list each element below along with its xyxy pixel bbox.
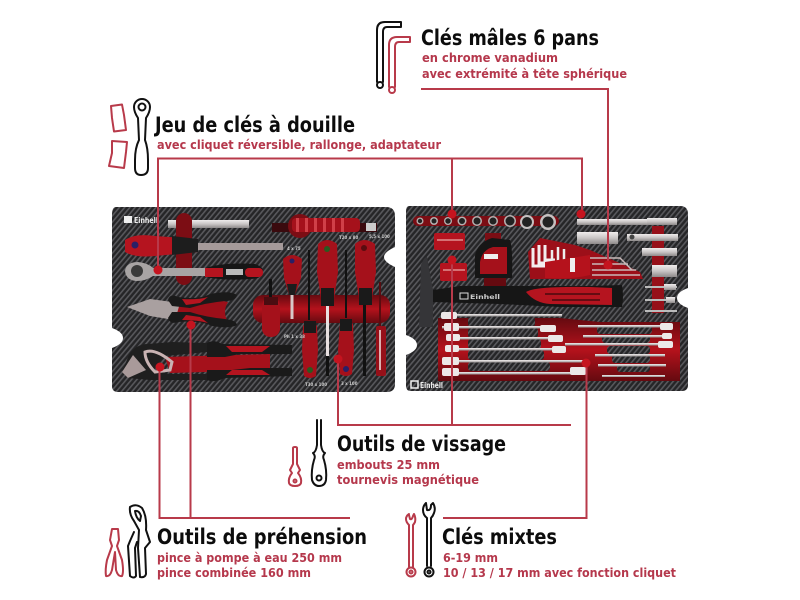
heading: Clés mâles 6 pans: avec extrémité à tête sphérique — [422, 66, 627, 81]
combination wrenches — [441, 312, 673, 377]
tape measure — [475, 233, 512, 286]
heading: Outils de préhension — [157, 525, 367, 580]
heading: Clés mixtes — [442, 525, 676, 580]
small size labels left tray: 4 x 75 — [287, 246, 301, 251]
small size labels left tray: 5,5 x 100 — [369, 234, 390, 239]
heading: Outils de préhension: Outils de préhension — [157, 525, 367, 550]
logo: Einhell right: Einhell — [420, 381, 443, 390]
heading: Outils de vissage: embouts 25 mm — [337, 457, 440, 472]
icon: hex keys — [377, 22, 410, 93]
foam tray right — [406, 206, 688, 391]
tool: lower screwdriver left — [302, 321, 329, 378]
heading: Outils de préhension: pince combinée 160 mm — [157, 565, 311, 580]
heading: Jeu de clés à douille — [153, 113, 442, 152]
socket accessories — [577, 218, 678, 313]
small size labels left tray — [284, 234, 390, 387]
allen key set — [528, 238, 643, 279]
foam islands under wrenches — [468, 317, 652, 372]
bit holders — [434, 233, 467, 281]
icon: wrenches — [406, 503, 435, 576]
tool: ratchet — [125, 262, 263, 281]
tool: screwdriver shafts — [308, 250, 381, 327]
small size labels left tray: Ph 1 x 38 — [284, 334, 305, 339]
sockets row — [413, 214, 559, 230]
heading: Jeu de clés à douille: avec cliquet réversible, rallonge, adaptateur — [157, 137, 442, 152]
heading: Clés mixtes: 10 / 13 / 17 mm avec fonction cliquet — [443, 565, 676, 580]
red vertical cutout — [176, 213, 192, 285]
icon: pliers — [106, 505, 150, 578]
heading: Outils de vissage: tournevis magnétique — [337, 472, 479, 487]
hammer — [419, 257, 623, 327]
tool: screwdriver horizontal — [125, 235, 283, 256]
tool: tall screwdriver green — [317, 240, 338, 356]
heading: Outils de vissage — [337, 432, 506, 487]
heading: Clés mâles 6 pans: Clés mâles 6 pans — [421, 26, 599, 51]
heading: Jeu de clés à douille: Jeu de clés à douille — [153, 113, 355, 138]
heading: Clés mixtes: 6-19 mm — [443, 550, 498, 565]
tool: voltage tester — [376, 326, 386, 376]
panel: left tool tray — [112, 207, 395, 392]
hammer: Einhell — [470, 294, 500, 301]
tool: stubby screwdriver — [262, 279, 280, 337]
icon: screwdrivers — [289, 420, 326, 486]
callout dots — [154, 210, 612, 372]
logo: Einhell right — [411, 381, 443, 390]
panel: right tool tray — [406, 206, 688, 391]
silver bar — [168, 220, 249, 228]
callout lines — [158, 89, 608, 518]
heading: Clés mixtes: Clés mixtes — [442, 525, 557, 550]
tool: small screwdriver — [283, 255, 302, 319]
tool: combination pliers — [127, 292, 237, 327]
logo: Einhell left — [124, 216, 158, 225]
heading: Outils de vissage: Outils de vissage — [337, 432, 506, 457]
heading: Clés mâles 6 pans: en chrome vanadium — [422, 50, 558, 65]
tool: socket extension rack — [272, 214, 377, 238]
icon: ratchet and sockets — [109, 99, 150, 175]
tool: tall screwdriver dark — [355, 240, 376, 376]
red cutout band — [253, 295, 390, 323]
logo: Einhell left: Einhell — [134, 216, 158, 225]
small size labels left tray: 3 x 100 — [341, 381, 358, 386]
tool: water pump pliers — [122, 341, 292, 381]
tool: lower screwdriver right — [338, 319, 354, 376]
heading: Outils de préhension: pince à pompe à eau 250 mm — [157, 550, 342, 565]
foam tray left — [112, 207, 395, 392]
small size labels left tray: T30 x 100 — [305, 382, 327, 387]
small size labels left tray: T20 x 80 — [339, 235, 358, 240]
wrench cutout — [438, 318, 680, 381]
heading: Clés mâles 6 pans — [421, 26, 627, 81]
